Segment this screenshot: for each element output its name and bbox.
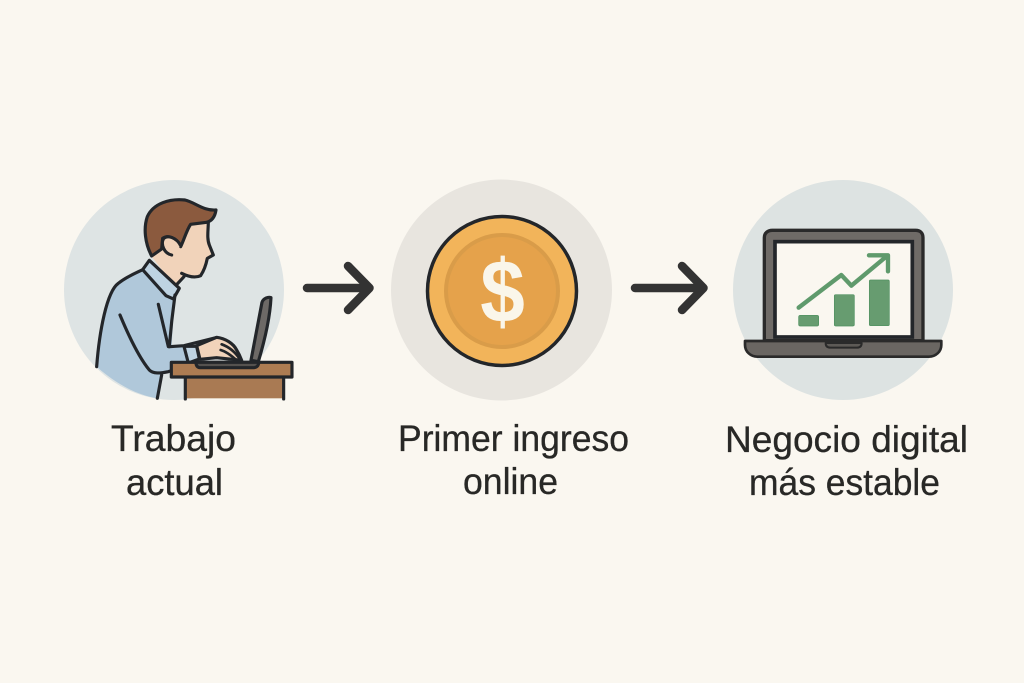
hand xyxy=(197,337,242,360)
laptop xyxy=(251,297,271,362)
laptop lid xyxy=(764,230,923,341)
label: Negocio digital más estable: Negocio digital xyxy=(725,419,968,460)
label: Primer ingreso online xyxy=(398,418,629,502)
label: Trabajo actual: actual xyxy=(126,462,223,503)
hair xyxy=(145,200,216,256)
icon: person at laptop xyxy=(64,180,292,400)
step 1: current job xyxy=(64,180,292,503)
label: Trabajo actual xyxy=(111,418,236,503)
cuff xyxy=(184,346,199,363)
arrow 1 xyxy=(307,266,370,310)
bar chart xyxy=(799,280,889,326)
trend arrow xyxy=(799,255,888,308)
icon: coin xyxy=(391,180,612,400)
step 2: first online income xyxy=(391,180,629,502)
step 3: more stable digital business xyxy=(725,180,968,503)
shirt front and folds xyxy=(169,295,175,347)
label: Negocio digital más estable: más estable xyxy=(749,462,940,503)
label: Primer ingreso online: online xyxy=(463,461,558,502)
label: Negocio digital más estable xyxy=(725,419,968,503)
laptop base xyxy=(745,341,941,357)
neck and face xyxy=(152,222,213,287)
label: Trabajo actual: Trabajo xyxy=(111,418,236,459)
label: Primer ingreso online: Primer ingreso xyxy=(398,418,629,459)
icon: coin: $ xyxy=(480,241,525,341)
collar xyxy=(143,260,179,299)
laptop base xyxy=(196,362,259,368)
screen xyxy=(775,242,912,337)
arrow 2 xyxy=(635,266,704,310)
desk xyxy=(186,377,283,398)
ear xyxy=(162,237,181,255)
icon: laptop with growth chart xyxy=(733,180,953,400)
shirt xyxy=(97,270,197,398)
